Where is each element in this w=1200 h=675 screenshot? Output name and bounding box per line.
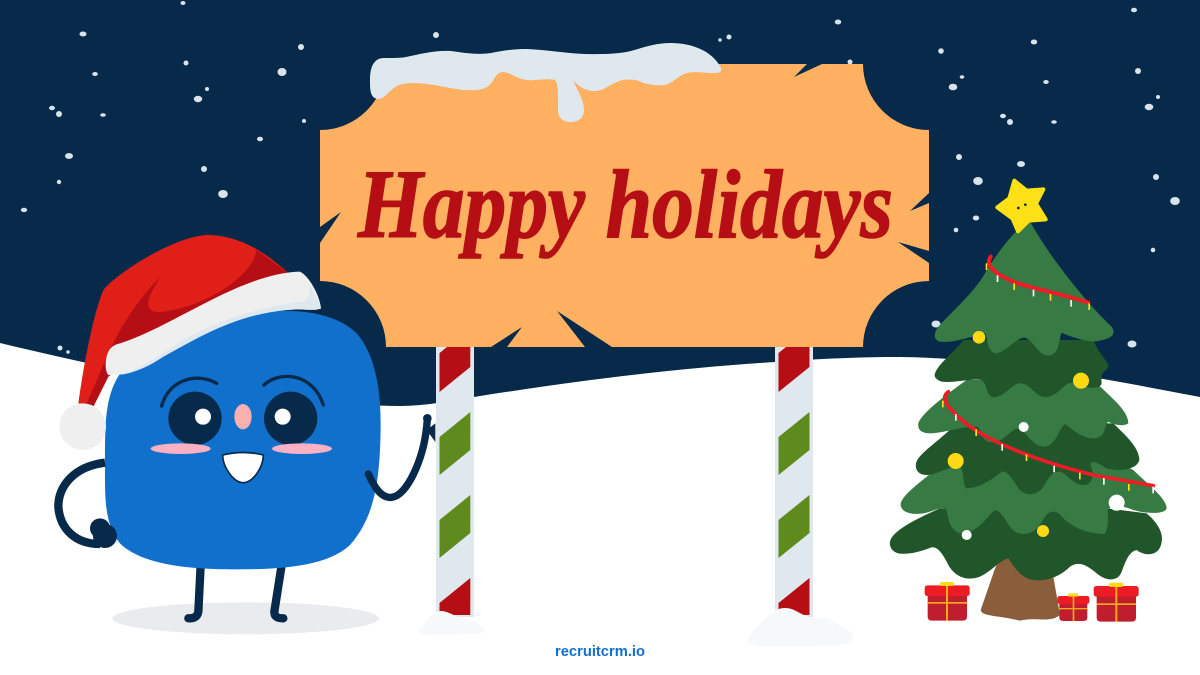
ornaments (948, 331, 1125, 540)
foliage (890, 222, 1167, 580)
gift small (1057, 593, 1089, 621)
star topper (997, 181, 1046, 231)
gift left (925, 582, 970, 621)
left sign post (436, 347, 474, 617)
legs (188, 565, 283, 618)
garland lights (942, 257, 1154, 493)
santa hat (59, 235, 321, 450)
arms (58, 414, 435, 548)
falling snow (21, 1, 1180, 354)
heading: Happy holidays (357, 151, 893, 259)
footer brand: recruitcrm.io (555, 644, 645, 660)
sign board (320, 64, 929, 347)
character mascot (58, 235, 435, 634)
body (105, 311, 381, 569)
face (151, 376, 332, 483)
night sky (0, 0, 1200, 406)
right sign post (775, 347, 813, 617)
snow on sign (370, 43, 721, 122)
snow mound right (748, 608, 853, 646)
snow mound left (418, 611, 485, 635)
ground shadow (112, 602, 379, 634)
christmas tree (890, 181, 1167, 622)
trunk (981, 556, 1060, 621)
gift right (1094, 583, 1139, 622)
